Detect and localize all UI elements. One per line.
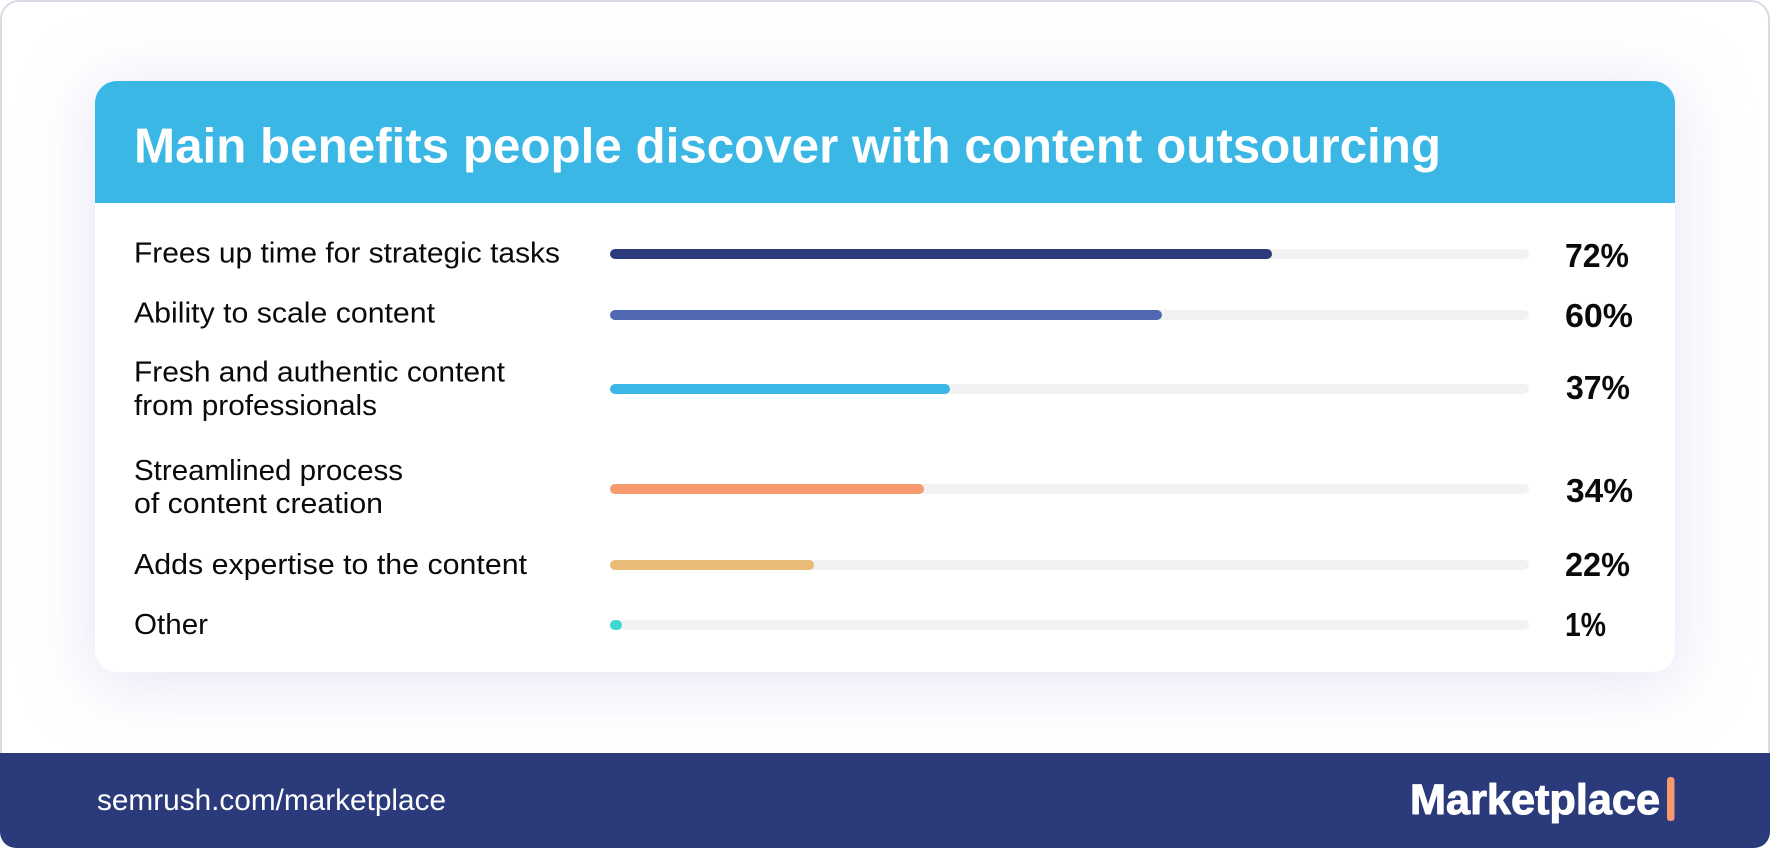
logo: Marketplace: Marketplace: [1410, 776, 1660, 824]
row: ability to scale 60%: 60%: [1565, 298, 1633, 335]
row: frees up time 72%: [134, 238, 1629, 275]
row: other 1%: Other: [134, 609, 209, 641]
row: streamlined process 34%: of content creation: [134, 488, 383, 520]
row: streamlined process 34%: [134, 455, 1633, 520]
title: Main benefits people discover with content outsourcing: [134, 120, 1441, 174]
row: adds expertise 22%: [134, 547, 1630, 584]
row: fresh and authentic 37%: from professionals: [134, 390, 377, 422]
card shadow: [90, 85, 1680, 685]
row: fresh and authentic 37%: 37%: [1566, 370, 1630, 407]
row: frees up time 72%: 72%: [1565, 238, 1629, 275]
footer url: semrush.com/marketplace: [97, 784, 446, 817]
header band: [95, 81, 1675, 203]
row: other 1%: [134, 607, 1606, 644]
row: other 1%: 1%: [1565, 607, 1606, 644]
row: ability to scale 60%: Ability to scale content: [134, 298, 435, 330]
row: frees up time 72%: Frees up time for strategic tasks: [134, 238, 560, 270]
panel: chart card: [95, 81, 1675, 672]
row: ability to scale 60%: [134, 298, 1633, 335]
row: streamlined process 34%: Streamlined process: [134, 455, 403, 487]
row: adds expertise 22%: Adds expertise to the content: [134, 549, 527, 581]
row: fresh and authentic 37%: Fresh and authentic content: [134, 356, 505, 388]
footer bar: [0, 753, 1770, 848]
row: adds expertise 22%: 22%: [1565, 547, 1630, 584]
row: fresh and authentic 37%: [134, 356, 1630, 422]
row: streamlined process 34%: 34%: [1566, 473, 1633, 510]
